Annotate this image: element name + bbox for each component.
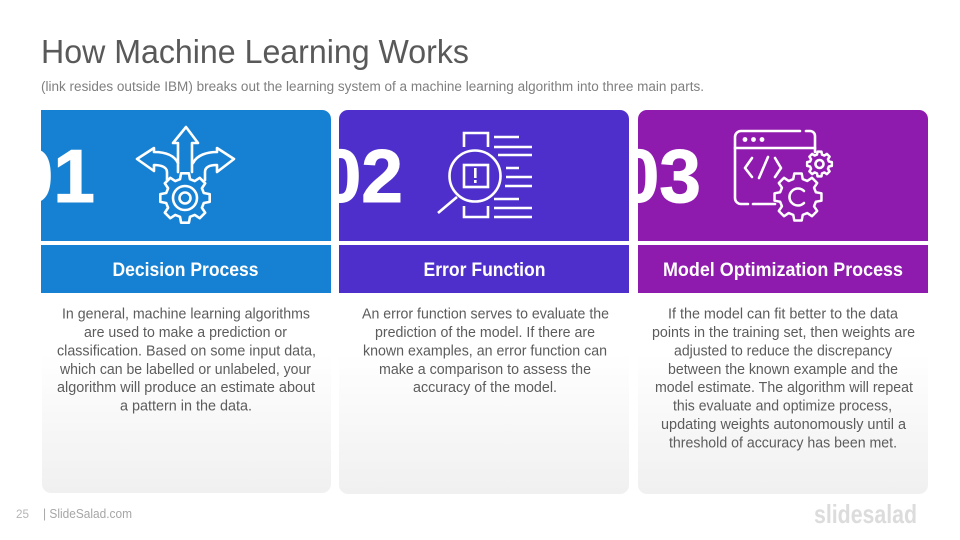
panel 3 text: between the known example and the: [668, 362, 898, 378]
title: How Machine Learning Works: [41, 33, 469, 70]
panel 1 text: In general, machine learning algorithms: [62, 306, 310, 322]
panel 1 number: 01: [12, 134, 95, 218]
panel 1 heading: Decision Process: [112, 259, 259, 281]
panel 1 text: are used to make a prediction or: [84, 325, 287, 341]
panel 2 text: accuracy of the model.: [413, 380, 557, 396]
panel 3 body card: [638, 293, 928, 494]
panel 1 text: algorithm will produce an estimate about: [57, 380, 315, 396]
panel 3 text: points in the training set, then weights are: [652, 325, 915, 341]
icon: magnifier on document: [438, 133, 532, 217]
page number: 25: [16, 507, 29, 521]
panel 3 text: model estimate. The algorithm will repeat: [655, 380, 913, 396]
panel 3 number: 03: [618, 134, 701, 218]
panel 2 top block: [339, 110, 629, 241]
footer site name: | SlideSalad.com: [43, 507, 132, 521]
panel 3 text: this evaluate and optimize process,: [673, 398, 892, 414]
panel 2 text: prediction of the model. If there are: [375, 325, 595, 341]
panel 1 heading bar: [41, 245, 331, 293]
panel 2 text: [362, 306, 609, 396]
panel 1 top block: [41, 110, 331, 241]
panel 2 heading bar: [339, 245, 629, 293]
panel 3 heading bar: [638, 245, 928, 293]
panel 3 text: adjusted to reduce the discrepancy: [674, 344, 893, 360]
panel 1 text: [57, 306, 316, 414]
panel 3 text: If the model can fit better to the data: [668, 306, 898, 322]
panel: error function: [320, 110, 629, 494]
panel 2 number: 02: [320, 134, 403, 218]
panel 2 heading: Error Function: [424, 259, 546, 281]
panel 1 text: a pattern in the data.: [120, 398, 252, 414]
panel: model optimization process: [618, 110, 928, 494]
panel: decision process: [12, 110, 331, 493]
icon: branching arrows and gear: [137, 127, 234, 223]
panel 3 top block: [638, 110, 928, 241]
panel 3 text: [652, 306, 915, 452]
panel 3 heading: Model Optimization Process: [663, 259, 903, 281]
panel 1 text: classification. Based on some input data,: [57, 344, 316, 360]
panel 2 text: make a comparison to assess the: [379, 362, 591, 378]
panel 1 text: which can be labelled or unlabeled, your: [59, 362, 311, 378]
panel 2 text: known examples, an error function can: [363, 344, 607, 360]
panel 1 body card: [42, 293, 331, 493]
panel 2 body card: [339, 293, 629, 494]
icon: window dots: [743, 137, 764, 142]
panel 3 text: threshold of accuracy has been met.: [669, 436, 897, 452]
subtitle: (link resides outside IBM) breaks out the learning system of a machine learning algorithm into three main parts.: [41, 79, 704, 94]
icon: code window and gears: [735, 131, 832, 220]
panel 3 text: updating weights autonomously until a: [661, 417, 906, 433]
logo wordmark: slidesalad: [814, 499, 917, 529]
panel 2 text: An error function serves to evaluate the: [362, 306, 609, 322]
